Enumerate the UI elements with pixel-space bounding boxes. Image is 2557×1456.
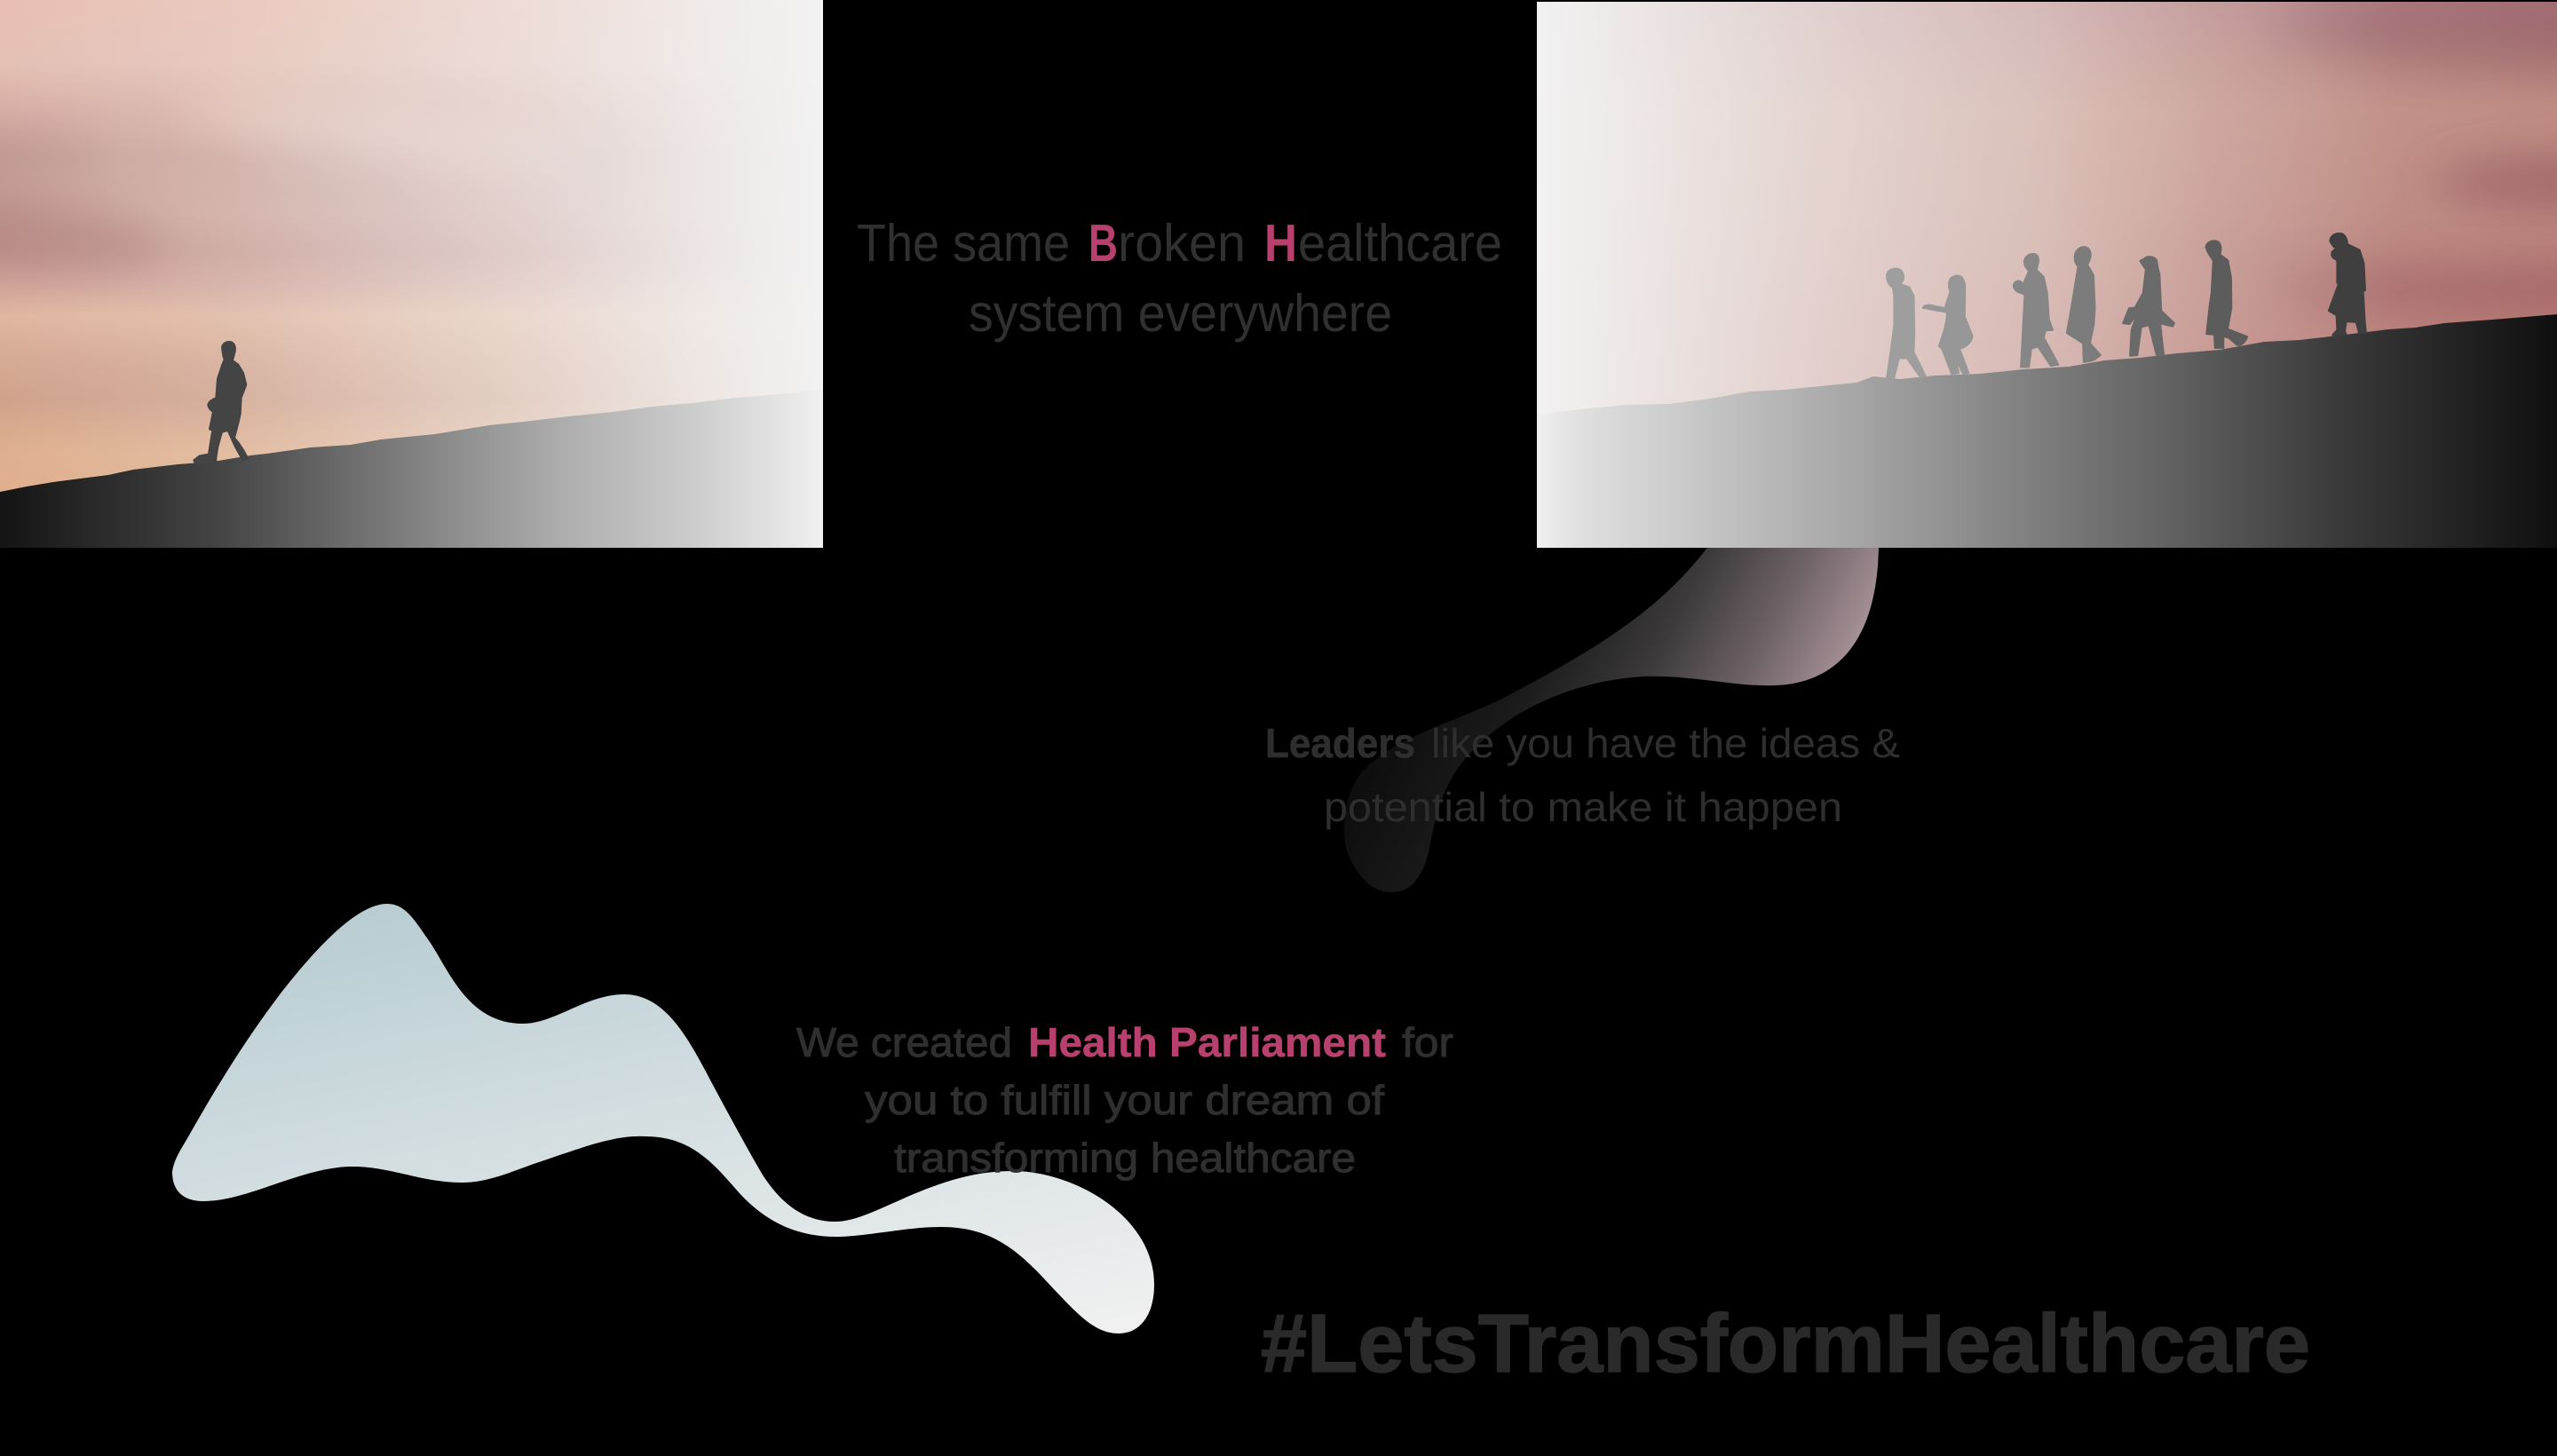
person 6 (2206, 241, 2247, 348)
hill (0, 390, 823, 548)
sky (1537, 2, 2557, 415)
person 4 (2067, 247, 2100, 362)
heading: same broken healthcare system: ealthcare (1298, 214, 1502, 273)
text block: leaders like you: potential to make it happen (1324, 784, 1842, 830)
hashtag: #LetsTransformHealthcare (1261, 1297, 2310, 1389)
text block: leaders like you: Leaders (1265, 720, 1415, 766)
hill (1537, 314, 2557, 548)
heading: same broken healthcare system (857, 214, 1502, 343)
panel: right photo of group walking on hill (1537, 0, 2557, 548)
heading: same broken healthcare system: The same (857, 214, 1070, 273)
text block: we created health parliament: transforming healthcare (894, 1135, 1356, 1181)
text block: leaders like you (1265, 720, 1900, 830)
icon: walking person silhouette (194, 342, 248, 464)
text block: we created health parliament: you to fulfill your dream of (865, 1077, 1384, 1123)
person 3 (2014, 254, 2058, 367)
person 2 (1923, 276, 1972, 374)
icon: group of seven walking people (1887, 233, 2365, 381)
text block: we created health parliament: We created (796, 1019, 1012, 1065)
heading: same broken healthcare system: roken (1118, 214, 1246, 273)
heading: same broken healthcare system: system everywhere (969, 284, 1392, 343)
sky (0, 0, 823, 492)
text block: we created health parliament (796, 1019, 1453, 1181)
person 5 (2124, 257, 2174, 356)
panel: left photo of lone walker on hill (0, 0, 823, 548)
text block: we created health parliament: for (1402, 1019, 1453, 1065)
heading: same broken healthcare system: H (1264, 214, 1297, 273)
pink gradient blob under right photo (1344, 542, 1879, 892)
heading: same broken healthcare system: B (1089, 214, 1118, 273)
text block: leaders like you: like you have the ideas & (1431, 720, 1900, 766)
pale blue wave shape (172, 904, 1154, 1333)
person 7 (2329, 233, 2365, 335)
person 1 (1887, 269, 1926, 381)
text block: we created health parliament: Health Parliament (1028, 1019, 1386, 1065)
